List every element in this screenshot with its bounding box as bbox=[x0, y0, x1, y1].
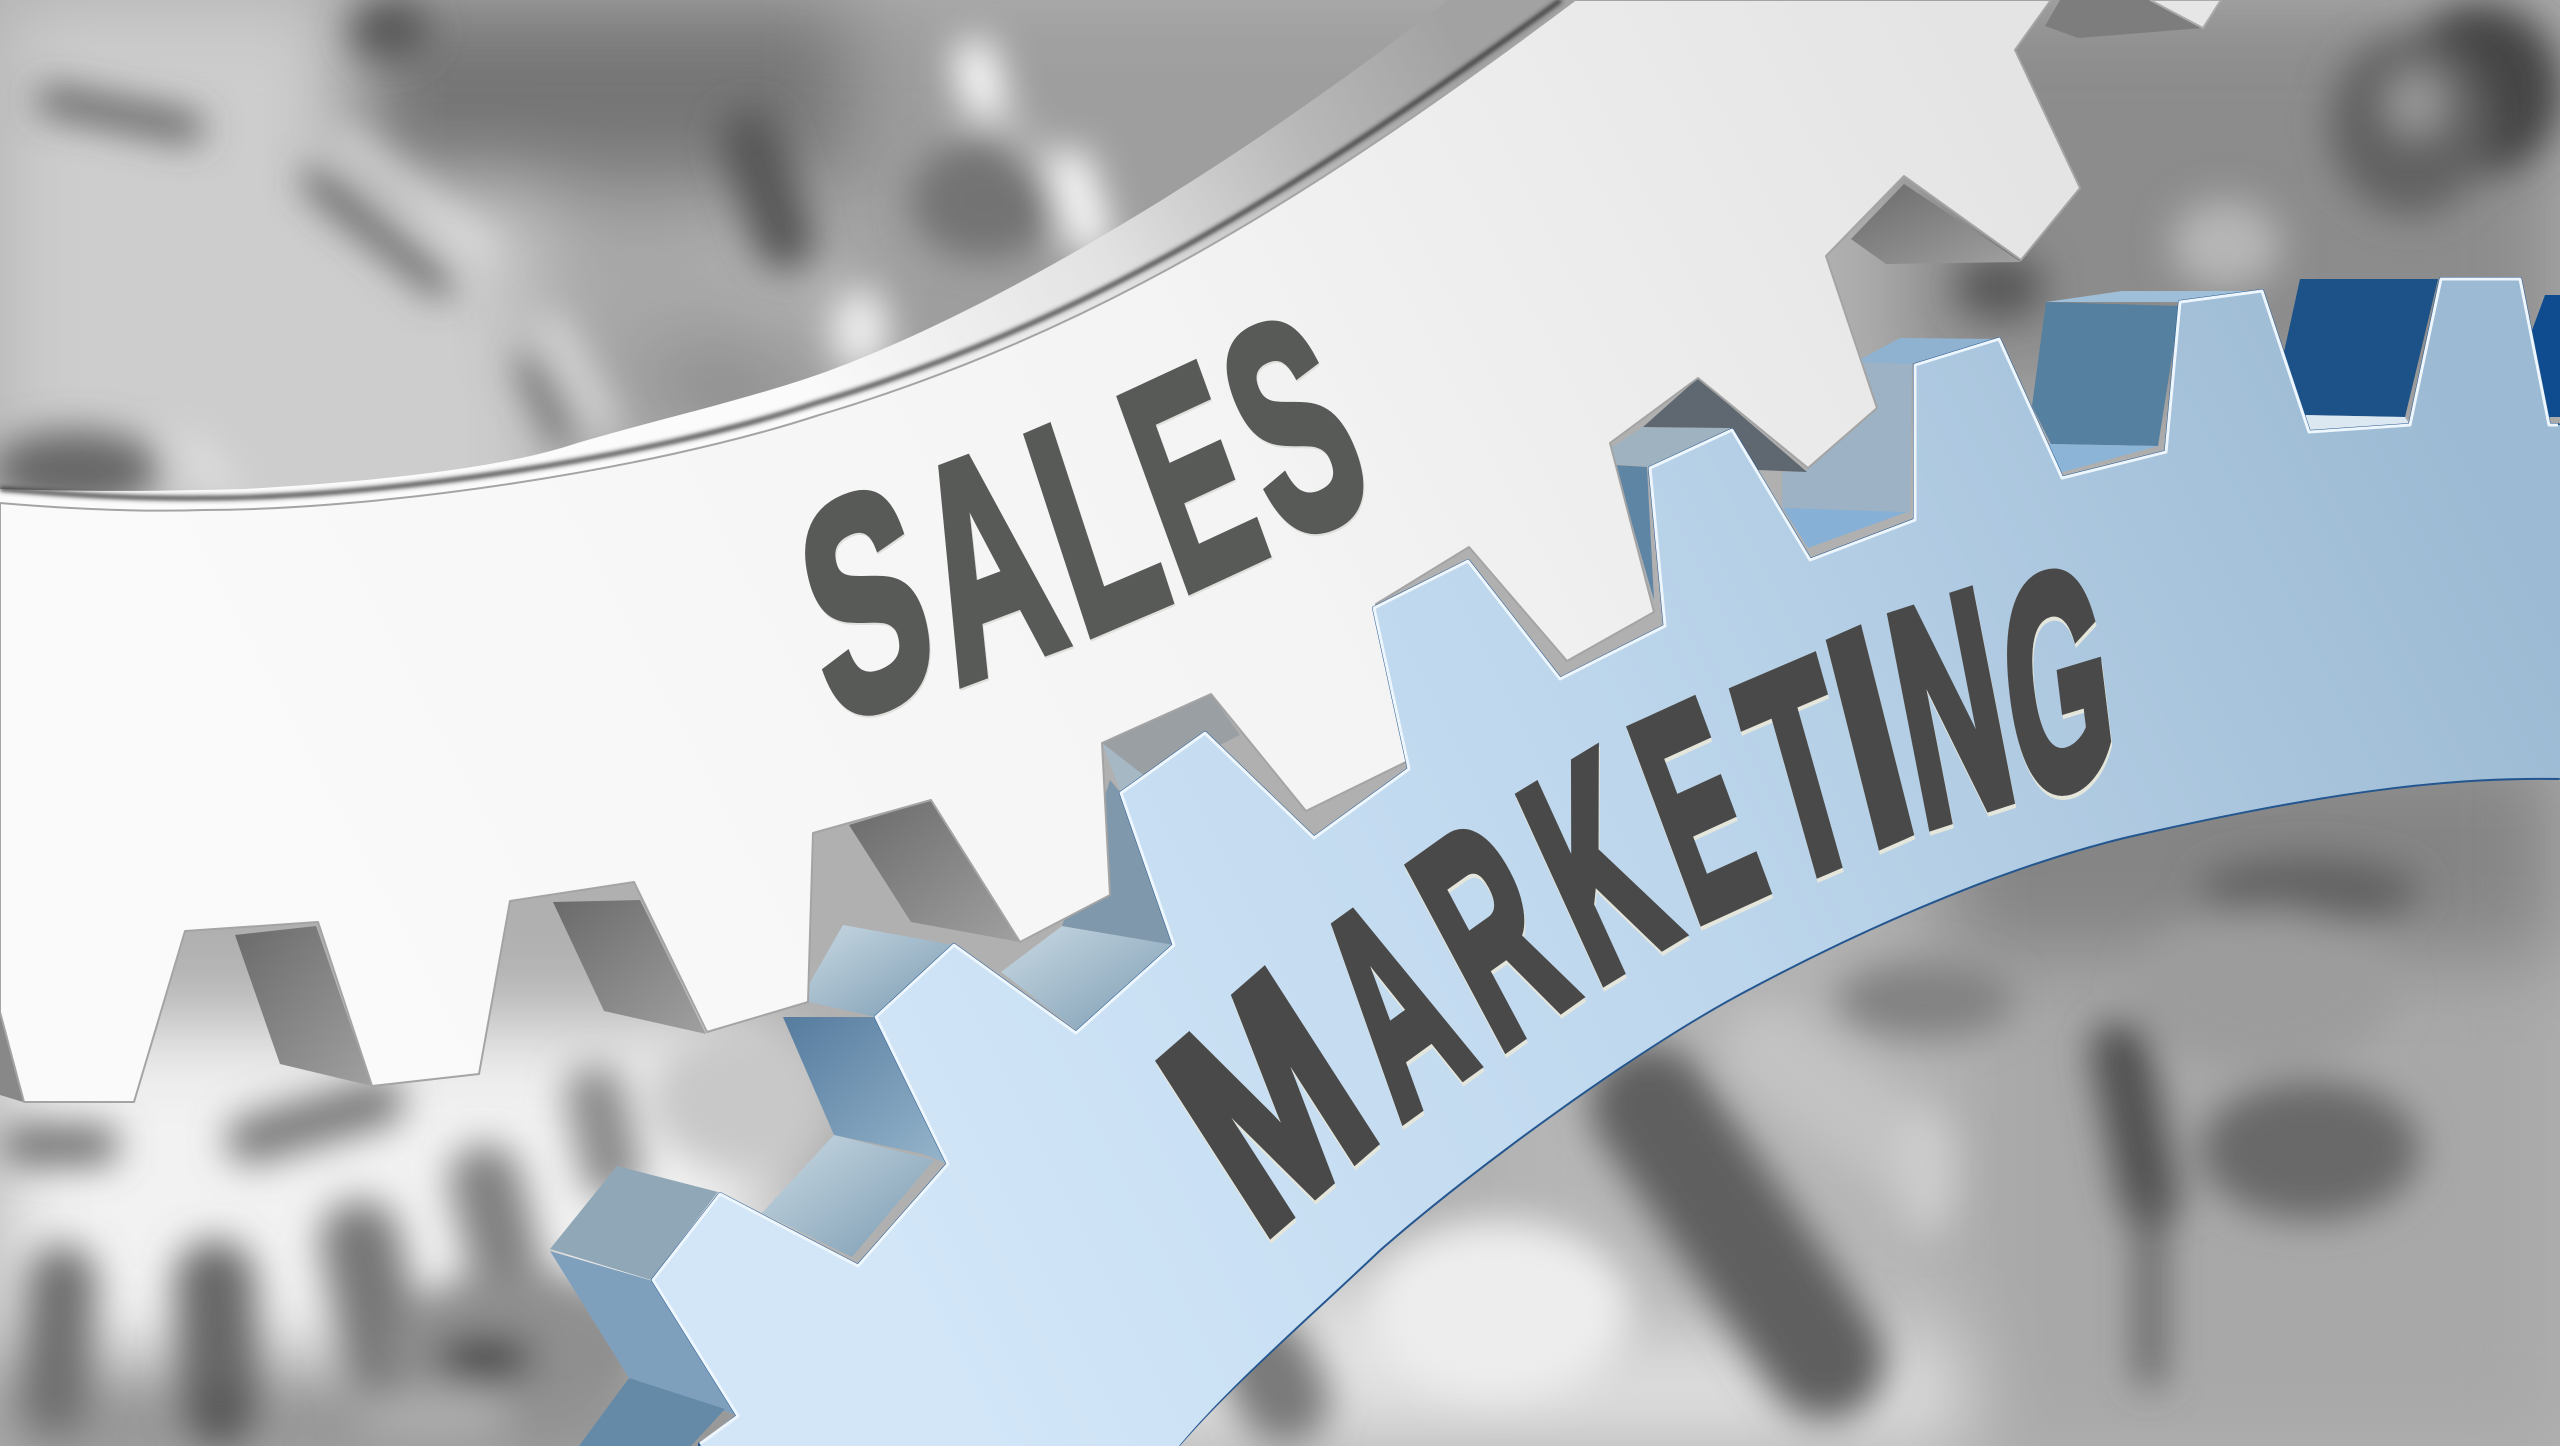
engraved word: MARKETING: K bbox=[1486, 694, 1708, 1042]
engraved word: MARKETING: T bbox=[1715, 598, 1887, 944]
engraved word: MARKETING: M bbox=[1119, 913, 1417, 1292]
engraved word: MARKETING: N bbox=[1870, 526, 2032, 891]
engraved word: SALES: L bbox=[997, 341, 1195, 699]
engraved word: MARKETING: G bbox=[1987, 502, 2128, 864]
engraved word: MARKETING: R bbox=[1372, 759, 1609, 1107]
engraved word: SALES: S bbox=[775, 418, 957, 789]
white gear: top right tooth tip bbox=[2150, 0, 2221, 28]
engraved word: SALES: S bbox=[1185, 253, 1403, 602]
engraved word: SALES bbox=[775, 253, 1403, 789]
white gear: front face bbox=[0, 0, 2080, 1102]
engraved word: MARKETING bbox=[1119, 502, 2128, 1292]
blue gear: back faces bbox=[550, 279, 2560, 1446]
engraved word: MARKETING: E bbox=[1601, 640, 1794, 981]
engraved word: MARKETING: I bbox=[1803, 565, 1937, 910]
white gear: upper bevel rim bbox=[0, 0, 1575, 511]
white gear: back faces bbox=[0, 0, 2203, 1102]
engraved word: SALES: E bbox=[1089, 301, 1294, 653]
engraved word: SALES: A bbox=[879, 380, 1091, 745]
blue gear: bright tooth edge bbox=[653, 279, 2558, 1444]
engraved word: MARKETING: A bbox=[1276, 840, 1510, 1173]
blue gear: edge shading bbox=[653, 279, 2558, 1446]
blue gear: front face bbox=[653, 279, 2560, 1446]
